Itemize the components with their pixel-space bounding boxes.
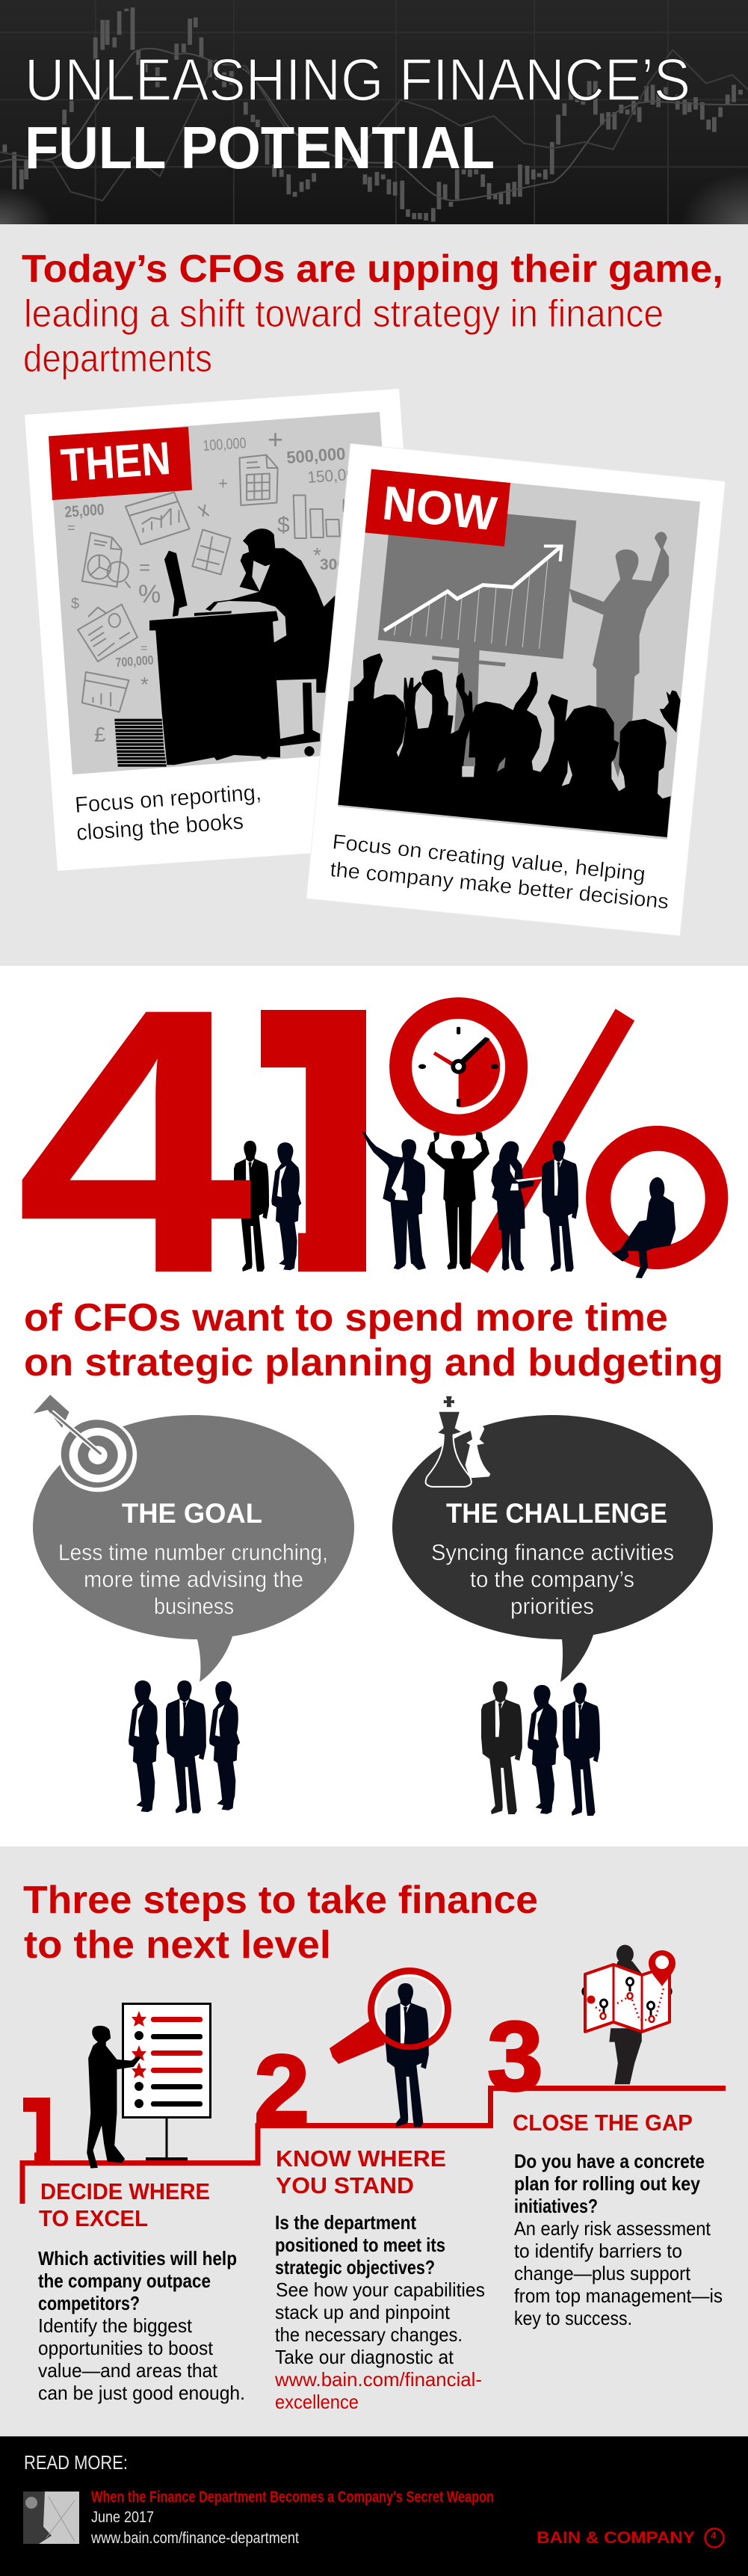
finance numbers: = — [139, 556, 150, 579]
big number 41 — [16, 931, 464, 1352]
step numbers: 3 — [487, 2001, 543, 2112]
person standing behind the 4 — [234, 1141, 269, 1272]
goal text: business — [154, 1593, 234, 1619]
article thumbnail — [23, 2492, 79, 2544]
challenge text: THE CHALLENGE — [446, 1498, 667, 1529]
panel: the challenge — [392, 1396, 713, 1816]
finance numbers: = — [140, 642, 147, 655]
step 2 body — [274, 2211, 485, 2413]
article details: www.bain.com/finance-department — [90, 2530, 299, 2547]
step 3 body: to identify barriers to — [514, 2240, 682, 2262]
logo: Bain and Company: BAIN & COMPANY — [537, 2528, 695, 2547]
step 3 body: initiatives? — [514, 2195, 598, 2217]
step 2 body: excellence — [275, 2391, 359, 2413]
finance numbers — [64, 424, 364, 746]
step 2 text — [274, 2145, 485, 2413]
step numbers: 2 — [254, 2035, 309, 2145]
step 1 body — [38, 2247, 245, 2404]
finance numbers: $ — [277, 513, 290, 537]
finance numbers: 300 — [320, 556, 346, 573]
read more label: READ MORE: — [24, 2451, 128, 2474]
big number 41: 4 — [16, 931, 256, 1352]
finance numbers: 150,000 — [307, 464, 364, 487]
step 1 heading: TO EXCEL — [39, 2205, 148, 2231]
card: now — [306, 444, 726, 936]
now badge: NOW — [380, 475, 500, 540]
step 2 heading: YOU STAND — [276, 2172, 414, 2198]
goal text: Less time number crunching, — [58, 1539, 328, 1565]
logo: Bain and Company: 4 — [711, 2530, 717, 2541]
step 1 body: Identify the biggest — [38, 2314, 193, 2337]
finance numbers: * — [140, 673, 149, 696]
step 2 body: stack up and pinpoint — [275, 2301, 451, 2323]
heading: three steps: Three steps to take finance — [23, 1879, 538, 1922]
step 3 body: from top management—is — [514, 2284, 723, 2307]
goal text: more time advising the — [84, 1566, 303, 1592]
step 1 body: value—and areas that — [38, 2359, 218, 2382]
article details: June 2017 — [91, 2509, 154, 2526]
step 2 body: Take our diagnostic at — [275, 2346, 454, 2368]
finance numbers: = — [67, 520, 75, 535]
panel: 41 percent statistic — [22, 997, 728, 1384]
heading: CFOs upping their game — [22, 247, 723, 380]
heading: three steps — [23, 1879, 538, 1967]
step 1 heading — [39, 2178, 210, 2231]
article details — [90, 2489, 494, 2547]
step 3 text — [513, 2110, 723, 2329]
step 3 body: An early risk assessment — [514, 2217, 711, 2240]
challenge text: Syncing finance activities — [431, 1539, 674, 1565]
illustration: man in magnifying glass — [330, 1968, 451, 2127]
step numbers: 1 — [10, 2080, 73, 2182]
step 1 text — [38, 2178, 245, 2404]
challenge text: to the company’s — [470, 1566, 634, 1592]
then caption — [74, 780, 262, 845]
percent sign with clock: % — [385, 928, 737, 1350]
crowd silhouette — [338, 645, 681, 837]
step 1 body: can be just good enough. — [38, 2382, 245, 2404]
finance numbers: 700,000 — [115, 653, 154, 670]
step 2 body: positioned to meet its — [275, 2234, 445, 2256]
man at desk silhouette — [114, 529, 335, 765]
business people silhouettes — [271, 1131, 676, 1278]
step 3 body: change—plus support — [514, 2262, 691, 2284]
staircase line — [22, 2089, 726, 2204]
step 1 body: the company outpace — [38, 2270, 211, 2292]
panel: the goal — [33, 1395, 354, 1814]
step 2 body: Is the department — [275, 2211, 416, 2234]
heading: three steps: to the next level — [24, 1923, 331, 1967]
step 2 body: the necessary changes. — [275, 2323, 463, 2346]
goal text — [58, 1498, 328, 1619]
step 1 heading: DECIDE WHERE — [40, 2178, 210, 2204]
finance numbers: * — [313, 543, 321, 567]
footer — [0, 2436, 748, 2576]
icon: chess pieces — [426, 1396, 490, 1487]
step 1 body: competitors? — [38, 2292, 140, 2314]
speech bubble: goal — [33, 1415, 354, 1682]
finance icons — [78, 455, 344, 712]
heading: CFOs upping their game: Today’s CFOs are upping their game, — [22, 247, 723, 291]
card: then — [25, 389, 432, 871]
big number 41: 1 — [191, 931, 464, 1352]
step 3 body: plan for rolling out key — [514, 2172, 700, 2195]
now caption: Focus on creating value, helping — [331, 830, 646, 886]
heading: CFOs upping their game: departments — [23, 337, 212, 380]
speech bubble: challenge — [392, 1415, 713, 1682]
panel: three steps — [0, 1846, 748, 2436]
step 3 body: key to success. — [514, 2307, 632, 2329]
step 3 body: Do you have a concrete — [514, 2150, 705, 2172]
then badge: THEN — [59, 433, 173, 492]
three people silhouettes — [129, 1680, 240, 1814]
finance numbers: £ — [94, 723, 106, 746]
then caption: Focus on reporting, — [74, 780, 262, 818]
heading: CFOs upping their game: leading a shift toward strategy in finance — [24, 292, 664, 336]
illustration: woman with map — [581, 1945, 676, 2084]
step 2 body: See how your capabilities — [276, 2278, 485, 2301]
finance numbers: + — [268, 424, 283, 455]
now caption — [329, 830, 670, 913]
heading: CFOs want more time: on strategic planning and budgeting — [24, 1341, 723, 1384]
challenge text: priorities — [510, 1593, 594, 1619]
article details: When the Finance Department Becomes a Company's Secret Weapon — [91, 2489, 494, 2506]
finance numbers: 100,000 — [203, 435, 247, 455]
finance numbers: % — [138, 580, 161, 608]
step 3 body — [514, 2150, 723, 2329]
goal text: THE GOAL — [122, 1498, 262, 1529]
presentation screen and presenter — [378, 514, 669, 777]
step 2 heading — [276, 2145, 446, 2198]
panel: then and now — [0, 224, 748, 966]
title: FULL POTENTIAL — [25, 114, 495, 181]
now caption: the company make better decisions — [329, 857, 670, 913]
percent sign with clock — [389, 997, 728, 1273]
title: UNLEASHING FINANCE’S — [25, 46, 690, 113]
title — [25, 46, 690, 181]
step 1 body: opportunities to boost — [38, 2337, 214, 2359]
challenge text — [431, 1498, 674, 1619]
finance numbers: 500,000 — [286, 444, 346, 467]
header banner — [0, 0, 748, 277]
heading: CFOs want more time — [24, 1296, 723, 1384]
step 2 heading: KNOW WHERE — [276, 2145, 446, 2172]
stock chart background — [0, 0, 748, 224]
step numbers — [10, 2001, 543, 2182]
then caption: closing the books — [75, 809, 244, 845]
step 3 heading: CLOSE THE GAP — [513, 2110, 693, 2136]
icon: target with arrow — [34, 1395, 137, 1492]
finance numbers: $ — [71, 596, 79, 612]
heading: CFOs want more time: of CFOs want to spend more time — [24, 1296, 668, 1340]
step 1 body: Which activities will help — [38, 2247, 237, 2270]
illustration: checklist board with man — [87, 2003, 211, 2169]
three people silhouettes — [481, 1681, 600, 1816]
finance numbers: + — [218, 474, 228, 493]
step 2 body: strategic objectives? — [275, 2256, 435, 2278]
step 2 body: www.bain.com/financial- — [274, 2368, 482, 2391]
finance numbers: 25,000 — [64, 501, 105, 521]
